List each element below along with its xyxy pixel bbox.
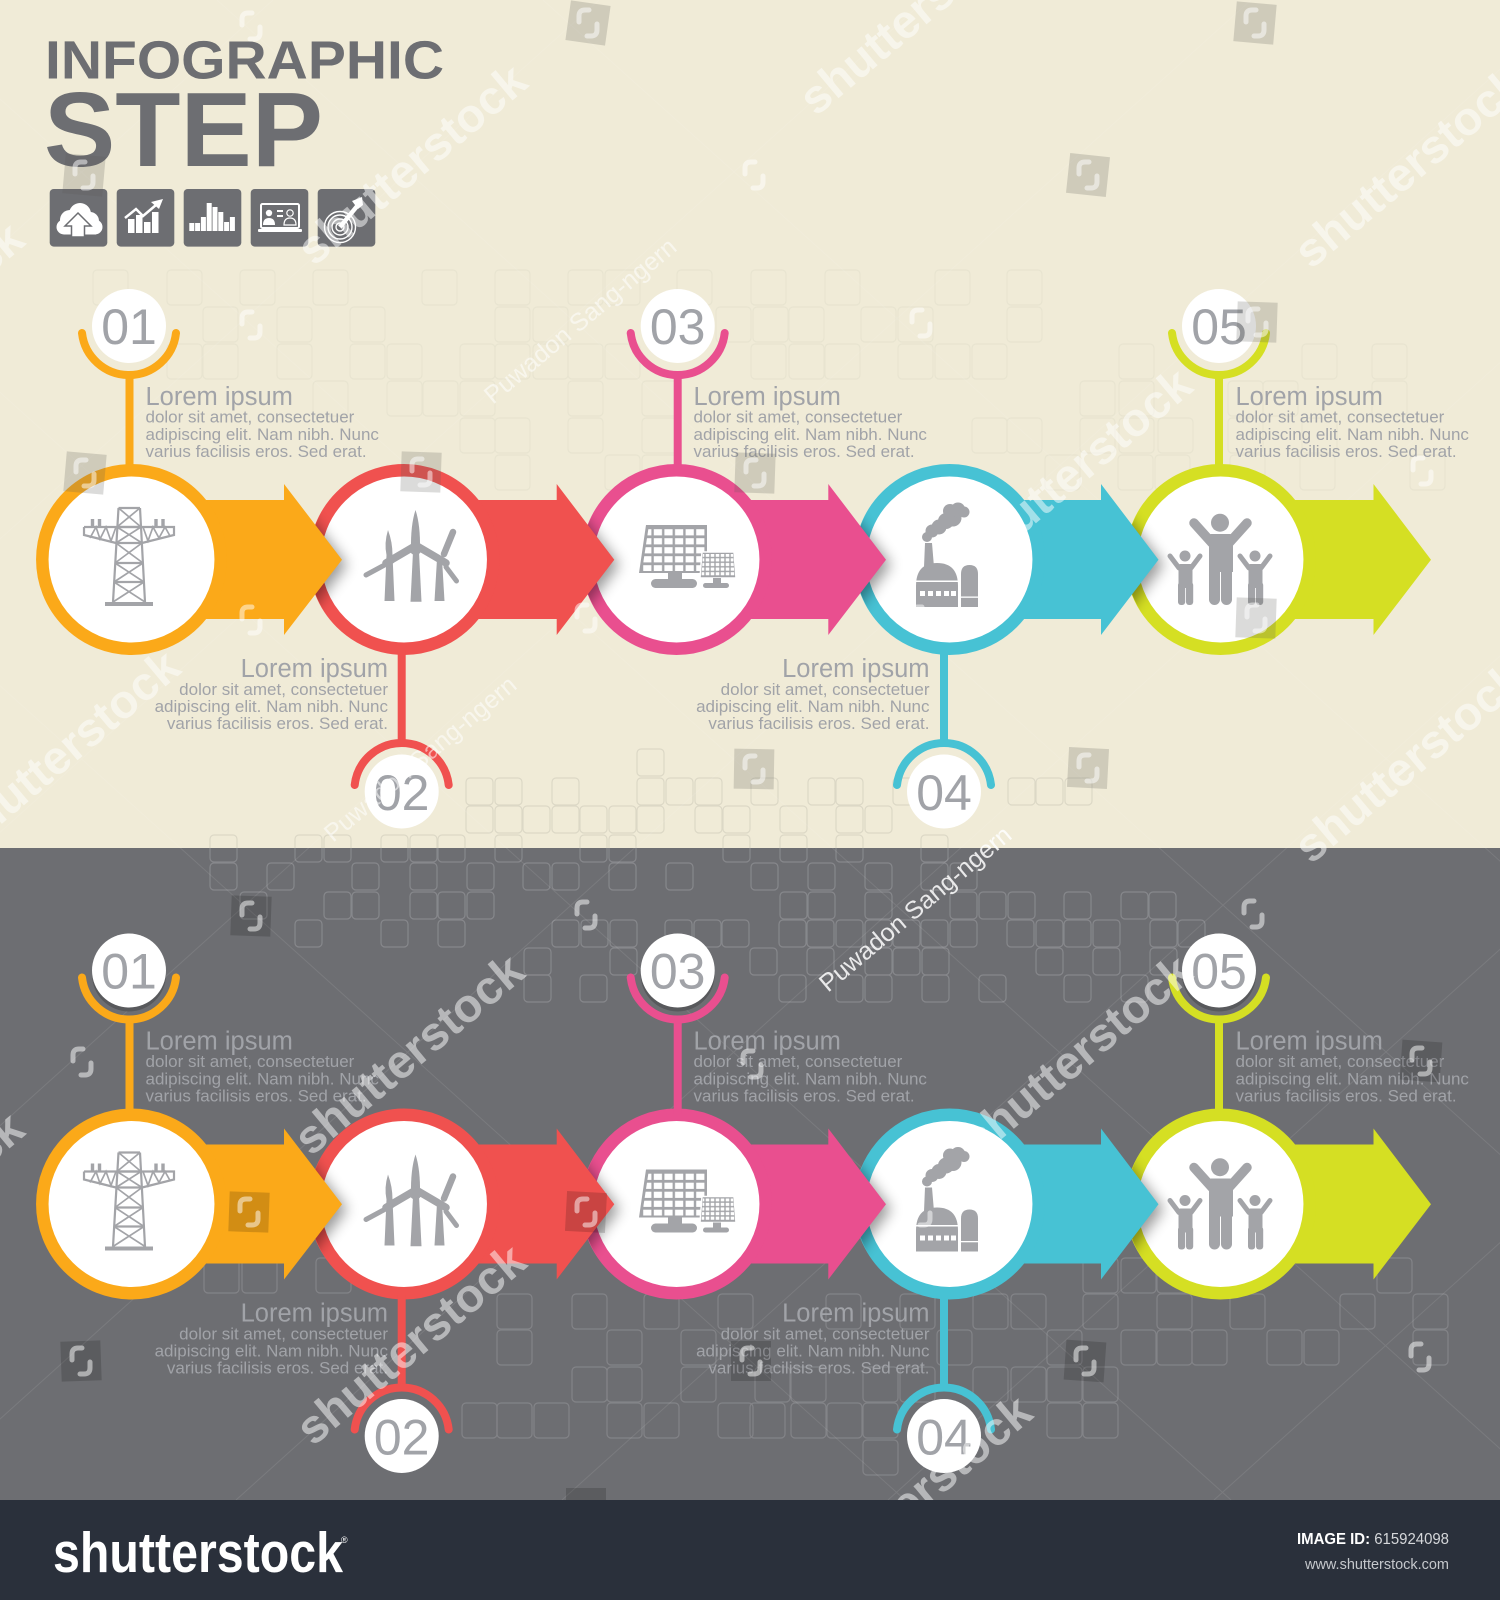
text block 04: Lorem ipsum [782, 1300, 930, 1328]
cup 04 [897, 743, 991, 785]
text block 04 [696, 655, 930, 733]
text block 01: dolor sit amet, consectetuer [146, 408, 355, 427]
number badge 01: 01 [101, 299, 157, 355]
watermark text: Puwadon Sang-ngern [479, 233, 682, 410]
connector 04 [940, 650, 948, 742]
cup 03 [631, 333, 725, 375]
ring 04 [860, 470, 1039, 649]
icon: factory [916, 502, 978, 607]
icon: people [1170, 1158, 1270, 1250]
connector 05 [1215, 1020, 1223, 1114]
icon: bar histogram [184, 189, 241, 247]
text block 05: varius facilisis eros. Sed erat. [1236, 442, 1457, 461]
footer url: www.shutterstock.com [1304, 1556, 1449, 1573]
cup 01 [82, 978, 176, 1019]
step 03 lower [562, 934, 927, 1293]
image id: IMAGE ID: 615924098 [1297, 1531, 1449, 1548]
heading: INFOGRAPHIC: INFOGRAPHIC [45, 30, 444, 90]
registered mark: ® [341, 1535, 348, 1545]
text block 03: varius facilisis eros. Sed erat. [694, 442, 915, 461]
arrow 03 [677, 484, 886, 635]
text block 02: dolor sit amet, consectetuer [179, 680, 388, 699]
number badge 02: 02 [374, 1410, 430, 1466]
text block 01: adipiscing elit. Nam nibh. Nunc [146, 425, 379, 444]
icon: people [1170, 514, 1270, 605]
text block 04: Lorem ipsum [782, 655, 930, 683]
icon: laptop video call [251, 189, 308, 247]
number badge 01 [92, 934, 166, 1012]
cup 05 [1172, 978, 1266, 1019]
number badge 03 [641, 934, 715, 1012]
text block 04: adipiscing elit. Nam nibh. Nunc [696, 697, 930, 716]
text block 01: Lorem ipsum [146, 383, 293, 411]
ring 02 [315, 470, 493, 649]
text block 05: dolor sit amet, consectetuer [1236, 408, 1445, 427]
text block 02 [155, 1300, 388, 1378]
arrow 04 [949, 484, 1158, 635]
ring 05 [1131, 1115, 1310, 1293]
text block 03: dolor sit amet, consectetuer [694, 408, 903, 427]
ring 01 [42, 470, 221, 649]
ring 04 [860, 1115, 1039, 1293]
icon: target and arrow [318, 189, 375, 247]
footer logo: shutterstock [53, 1521, 343, 1585]
text block 05 [1236, 1028, 1469, 1106]
text block 05: dolor sit amet, consectetuer [1236, 1052, 1445, 1071]
text block 04: varius facilisis eros. Sed erat. [708, 1358, 930, 1378]
icon: pylon [84, 1152, 174, 1250]
text block 03: adipiscing elit. Nam nibh. Nunc [694, 425, 927, 444]
step 04 upper [696, 470, 1158, 828]
number badge 02 [365, 754, 439, 828]
watermark text: shutterstock [951, 356, 1202, 579]
icon: pylon [84, 508, 174, 606]
connector 01 [126, 375, 134, 470]
cup 04 [897, 1388, 991, 1430]
number badge 04 [907, 1399, 981, 1473]
top icon row [50, 189, 375, 247]
connector 02 [398, 650, 406, 742]
text block 01: Lorem ipsum [146, 1028, 293, 1056]
text block 03: dolor sit amet, consectetuer [694, 1052, 903, 1071]
watermark text: shutterstock [286, 52, 537, 275]
text block 02: adipiscing elit. Nam nibh. Nunc [155, 697, 388, 716]
text block 05: adipiscing elit. Nam nibh. Nunc [1236, 1070, 1469, 1088]
text block 01: varius facilisis eros. Sed erat. [146, 442, 367, 461]
title [44, 30, 444, 189]
connector 05 [1215, 375, 1223, 470]
ring 03 [587, 470, 766, 649]
ring 05 [1131, 470, 1310, 649]
text block 04: dolor sit amet, consectetuer [721, 1324, 930, 1344]
ring 01 [42, 1115, 221, 1293]
background: grey lower panel [0, 848, 1500, 1500]
step 03 upper [562, 289, 927, 649]
watermark text: Puwadon Sang-ngern [319, 671, 522, 848]
cup 02 [355, 1388, 449, 1430]
text block 05: Lorem ipsum [1236, 1028, 1383, 1056]
arrow 02 [404, 484, 614, 635]
text block 02 [155, 655, 388, 733]
text block 01: varius facilisis eros. Sed erat. [146, 1086, 367, 1106]
text block 03: Lorem ipsum [694, 383, 841, 411]
number badge 04: 04 [916, 1410, 972, 1466]
icon: cloud upload [50, 189, 107, 247]
number badge 02: 02 [374, 765, 430, 821]
text block 03 [694, 1028, 927, 1106]
number badge 03 [641, 289, 715, 363]
connector 01 [126, 1020, 134, 1114]
step 05 lower [1106, 934, 1469, 1293]
cup 01 [82, 333, 176, 375]
panel: upper process (light) [42, 289, 1469, 828]
watermark text: Puwadon Sang-ngern [814, 821, 1017, 998]
text block 01 [146, 1028, 379, 1106]
heading: STEP: STEP [44, 71, 323, 189]
number badge 02 [365, 1399, 439, 1473]
text block 05: adipiscing elit. Nam nibh. Nunc [1236, 425, 1469, 444]
arrow 05 [1220, 484, 1431, 635]
connector 03 [674, 375, 682, 470]
arrow 03 [677, 1128, 886, 1280]
text block 03: varius facilisis eros. Sed erat. [694, 1086, 915, 1106]
connector 04 [940, 1294, 948, 1386]
number badge 05 [1182, 934, 1256, 1012]
step 04 lower [696, 1115, 1158, 1473]
number badge 01: 01 [101, 944, 157, 1000]
step 01 upper [42, 289, 379, 649]
text block 04: varius facilisis eros. Sed erat. [708, 714, 930, 733]
watermark text: shutterstock [791, 1383, 1042, 1600]
arrow 01 [131, 1128, 342, 1280]
number badge 04 [907, 754, 981, 828]
cup 03 [631, 978, 725, 1019]
number badge 05: 05 [1191, 299, 1247, 355]
text block 03: adipiscing elit. Nam nibh. Nunc [694, 1070, 927, 1088]
number badge 05: 05 [1191, 944, 1247, 1000]
number badge 05 [1182, 289, 1256, 363]
text block 03 [694, 383, 927, 461]
footer bar [0, 1500, 1500, 1600]
text block 04: dolor sit amet, consectetuer [721, 680, 930, 699]
cup 02 [355, 743, 449, 785]
arrow 04 [949, 1128, 1158, 1280]
number badge 01 [92, 289, 166, 363]
icon: wind turbines [366, 1154, 456, 1246]
step 02 lower [155, 1115, 614, 1473]
cup 05 [1172, 333, 1266, 375]
text block 01 [146, 383, 379, 461]
icon: solar panels [639, 525, 736, 588]
watermark text: shutterstock [951, 943, 1202, 1166]
text block 04: adipiscing elit. Nam nibh. Nunc [696, 1342, 930, 1360]
number badge 03: 03 [650, 299, 706, 355]
number badge 03: 03 [650, 944, 706, 1000]
text block 04 [696, 1300, 930, 1378]
step 05 upper [1106, 289, 1469, 649]
number badge 04: 04 [916, 765, 972, 821]
text block 02: varius facilisis eros. Sed erat. [167, 1358, 388, 1378]
text block 02: varius facilisis eros. Sed erat. [167, 714, 388, 733]
connector 03 [674, 1020, 682, 1114]
step 01 lower [42, 934, 379, 1293]
ring 03 [587, 1115, 766, 1293]
text block 03: Lorem ipsum [694, 1028, 841, 1056]
arrow 05 [1220, 1128, 1431, 1280]
watermark text: shutterstock [285, 1232, 536, 1455]
watermark text: shutterstock [283, 942, 534, 1165]
icon: rising chart [117, 189, 174, 247]
text block 01: dolor sit amet, consectetuer [146, 1052, 355, 1071]
icon: wind turbines [366, 510, 456, 602]
icon: factory [916, 1147, 978, 1252]
ring 02 [315, 1115, 493, 1293]
arrow 02 [404, 1128, 614, 1280]
icon: solar panels [639, 1170, 736, 1232]
panel: lower process (dark) [42, 934, 1469, 1473]
connector 02 [398, 1294, 406, 1386]
text block 01: adipiscing elit. Nam nibh. Nunc [146, 1070, 379, 1088]
arrow 01 [131, 484, 342, 635]
background: cream upper panel [0, 0, 1500, 848]
text block 02: Lorem ipsum [241, 1300, 388, 1328]
text block 02: dolor sit amet, consectetuer [179, 1324, 388, 1344]
step 02 upper [155, 470, 614, 828]
text block 05: varius facilisis eros. Sed erat. [1236, 1086, 1457, 1106]
text block 05 [1236, 383, 1469, 461]
text block 02: Lorem ipsum [241, 655, 388, 683]
text block 05: Lorem ipsum [1236, 383, 1383, 411]
text block 02: adipiscing elit. Nam nibh. Nunc [155, 1342, 388, 1360]
